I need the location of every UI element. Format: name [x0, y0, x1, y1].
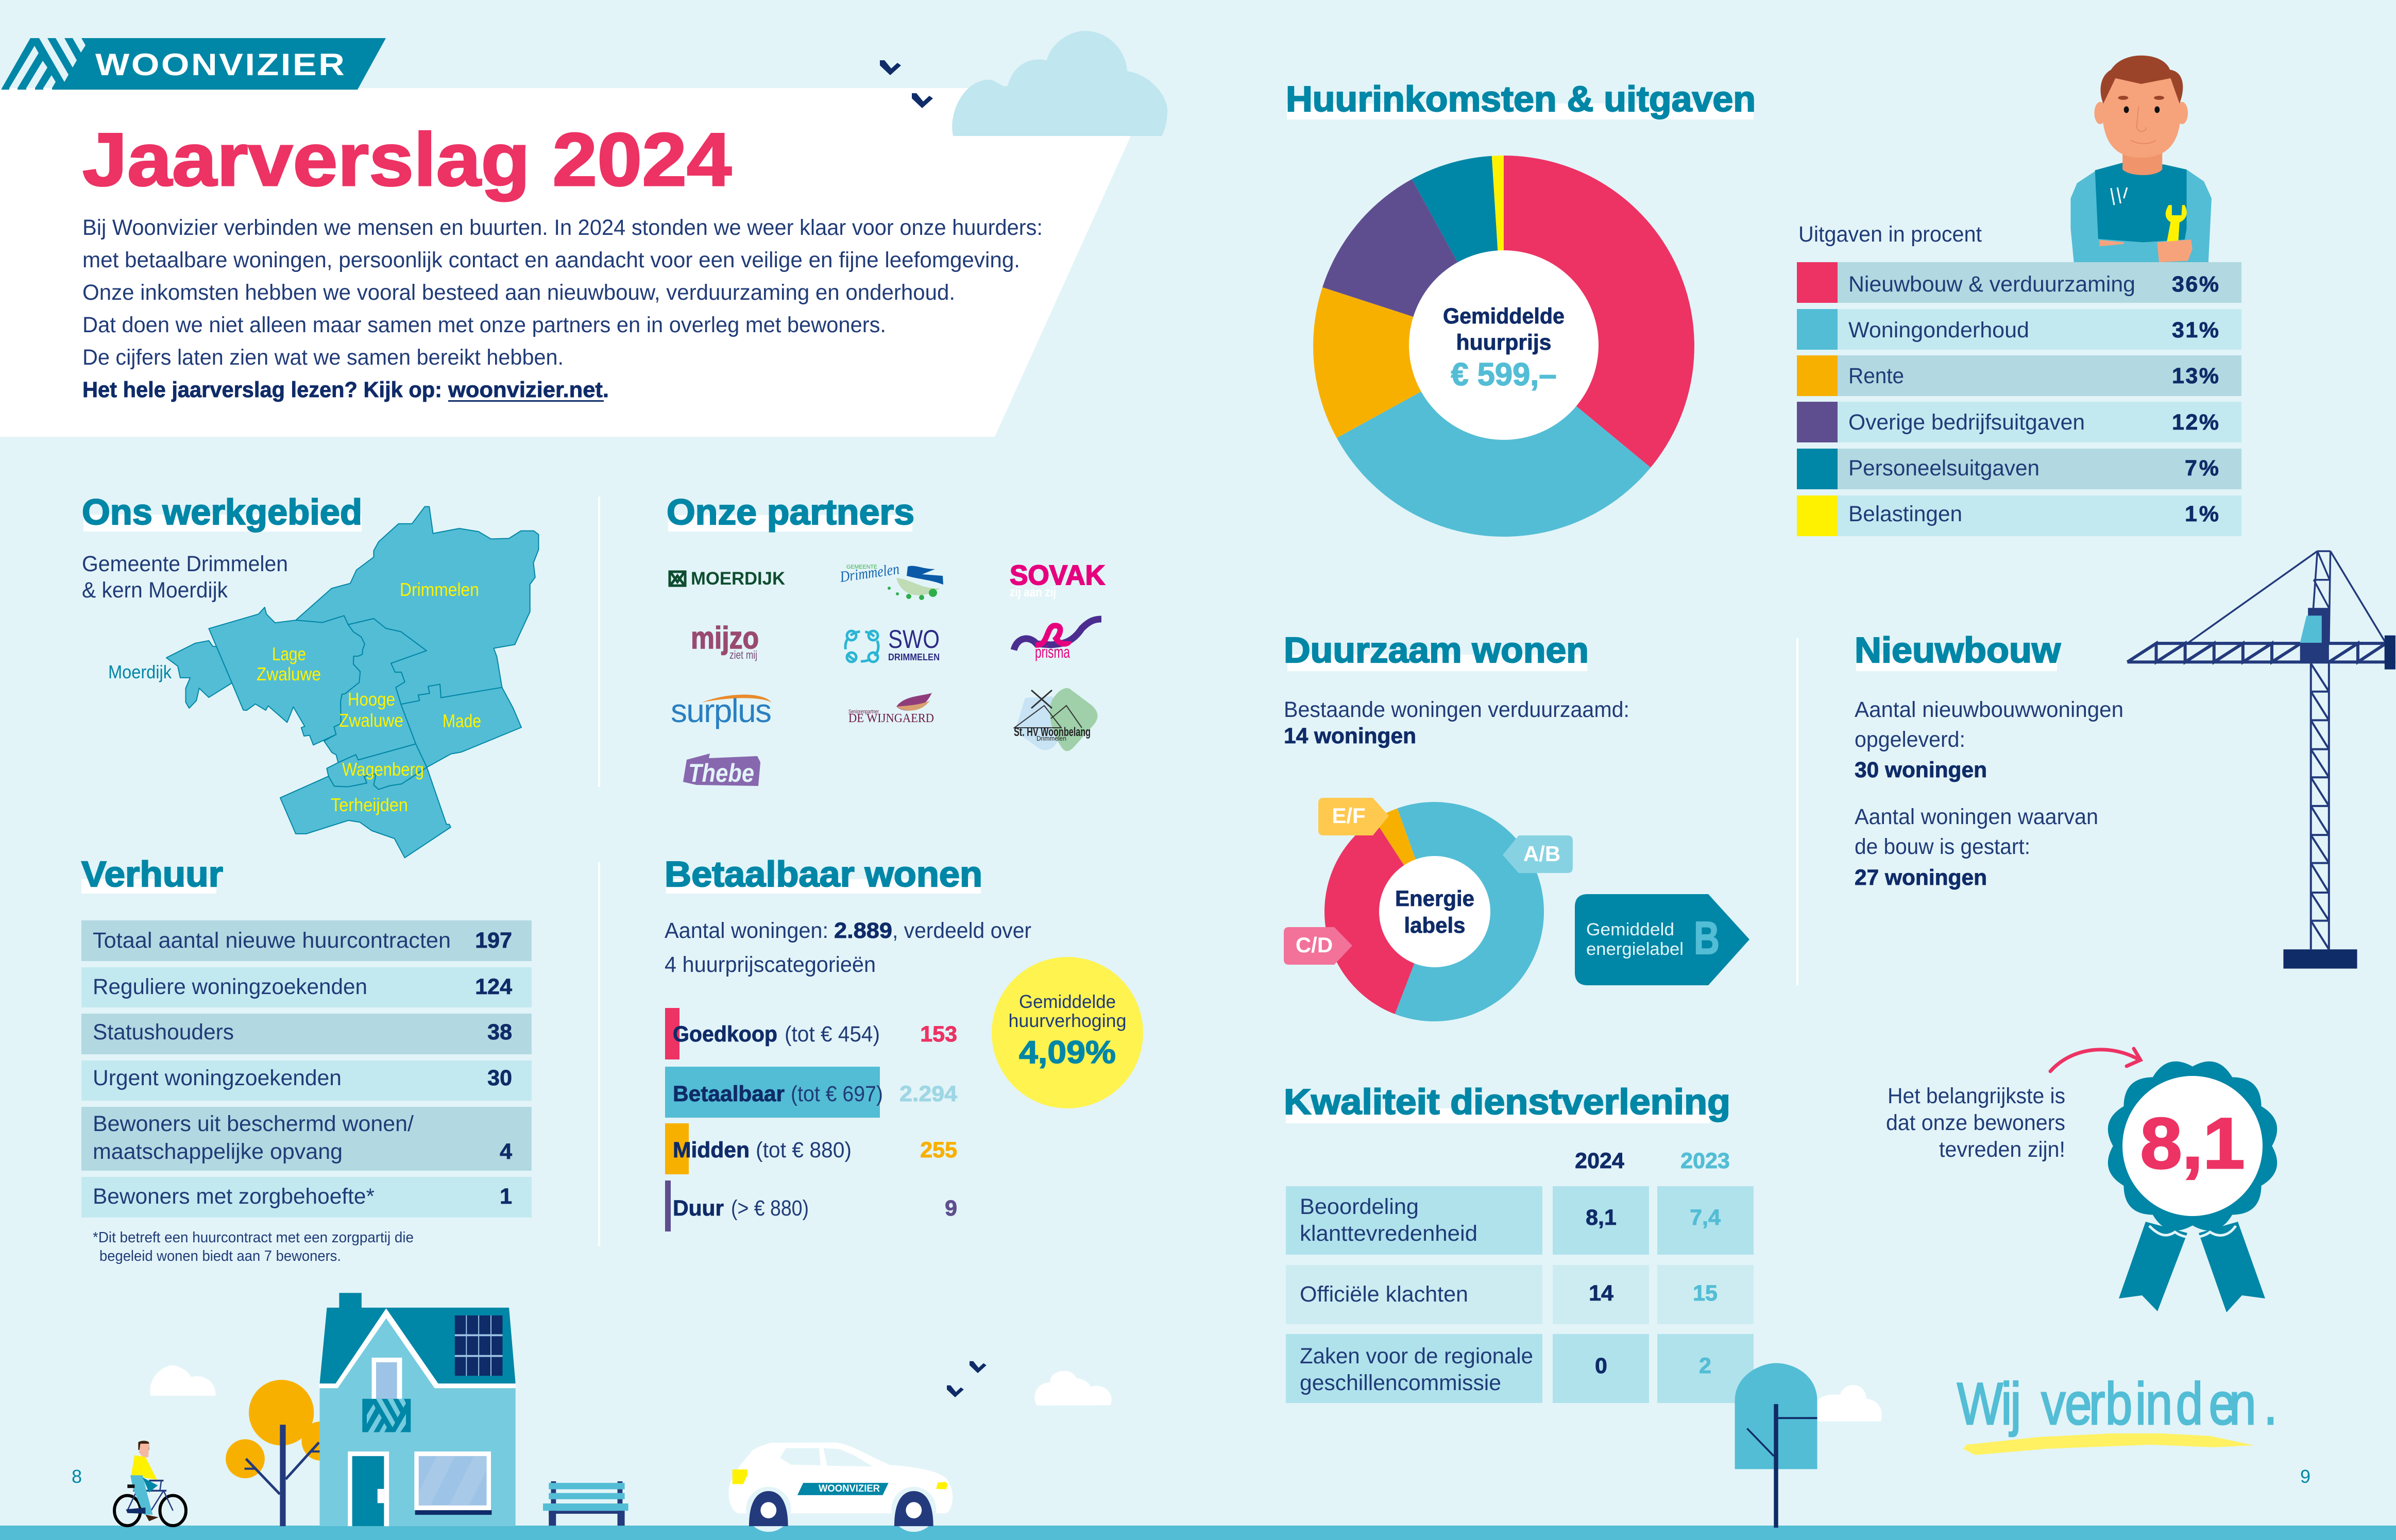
bar chart: [665, 1008, 957, 1231]
betaalbaar intro: Aantal woningen:: [665, 918, 828, 943]
table: kwaliteit: 2024: [1575, 1149, 1624, 1173]
table: kwaliteit: Officiële klachten: [1300, 1282, 1468, 1307]
intro text: met betaalbare woningen, persoonlijk contact en aandacht voor een veilige en fijne leefomgeving.: [82, 248, 1020, 272]
duurzaam text: [1284, 697, 1629, 748]
callout: huurverhoging: [992, 957, 1143, 1108]
table: kwaliteit: 2: [1699, 1354, 1711, 1378]
tag: E/F: E/F: [1332, 803, 1366, 828]
illustration: man: [2070, 56, 2212, 262]
callout: huurverhoging: 4,09%: [1019, 1035, 1116, 1070]
werkgebied subtitle: [82, 552, 288, 603]
cloud left: [150, 1365, 216, 1396]
logo: de wijngaerd: [848, 693, 934, 725]
donut: uitgaven: Gemiddelde: [1443, 304, 1565, 329]
quote text: tevreden zijn!: [1939, 1137, 2065, 1162]
slogan: Wij verbinden.: [1957, 1371, 2278, 1437]
legend table: uitgaven: Rente: [1848, 364, 1904, 388]
birds top: [880, 60, 933, 108]
rosette: [2109, 1063, 2276, 1312]
logo: mijzo: ziet mij: [729, 648, 757, 661]
logo: mijzo: mijzo: [691, 621, 759, 655]
table: verhuur: 38: [487, 1020, 512, 1045]
heading: onze partners: Onze partners: [667, 492, 914, 532]
intro text: Het hele jaarverslag lezen? Kijk op:: [82, 378, 442, 402]
cloud middle: [1034, 1371, 1112, 1406]
arrow: [2050, 1049, 2140, 1071]
table: verhuur: Urgent woningzoekenden: [93, 1066, 342, 1090]
legend table: uitgaven: Belastingen: [1848, 502, 1962, 526]
nieuwbouw text: opgeleverd:: [1855, 727, 1965, 752]
logo: gemeente drimmelen: [839, 560, 943, 600]
badge: gemiddeld energielabel: [1575, 894, 1749, 985]
table: kwaliteit: Beoordeling: [1300, 1194, 1419, 1219]
heading: verhuur: Verhuur: [81, 854, 223, 894]
callout: huurverhoging: huurverhoging: [1009, 1010, 1126, 1031]
logo: swo drimmelen: [845, 625, 940, 662]
heading: nieuwbouw: Nieuwbouw: [1855, 630, 2061, 670]
uitgaven caption: Uitgaven in procent: [1798, 222, 1982, 247]
logo: woonbelang: Drimmelen: [1036, 734, 1066, 742]
bar chart: Duur: [673, 1196, 724, 1221]
map: Hooge: [348, 689, 395, 710]
map: Terheijden: [331, 794, 408, 815]
legend table: uitgaven: [1797, 262, 2241, 536]
bar chart: 2.294: [899, 1082, 957, 1106]
intro text: Dat doen we niet alleen maar samen met onze partners en in overleg met bewoners.: [82, 313, 886, 337]
tag: A/B: [1503, 835, 1573, 873]
nieuwbouw text: de bouw is gestart:: [1855, 834, 2030, 859]
logo: de wijngaerd: Seniorenpartner: [848, 709, 879, 715]
page number 8: 8: [72, 1466, 82, 1487]
tree right with cloud: [1735, 1363, 1882, 1528]
badge: gemiddeld energielabel: B: [1694, 913, 1720, 964]
nieuwbouw text: Aantal nieuwbouwwoningen: [1855, 697, 2123, 722]
legend table: uitgaven: 31%: [2172, 318, 2219, 343]
intro text: [82, 215, 1043, 402]
tag: E/F: [1318, 798, 1389, 835]
logo: surplus: surplus: [671, 692, 772, 729]
legend table: uitgaven: 1%: [2185, 502, 2219, 526]
legend table: uitgaven: 13%: [2172, 364, 2219, 388]
bar chart: (> € 880): [731, 1196, 809, 1221]
legend table: uitgaven: Overige bedrijfsuitgaven: [1848, 410, 2085, 435]
illustration: crane: [2127, 551, 2395, 969]
logo: swo drimmelen: DRIMMELEN: [888, 652, 940, 662]
map: Lage: [272, 643, 306, 664]
car: [728, 1443, 953, 1532]
logo: prisma: prisma: [1035, 643, 1070, 661]
donut: uitgaven: € 599,–: [1451, 357, 1557, 392]
footnote: [93, 1229, 414, 1264]
bar chart: 255: [920, 1138, 957, 1162]
betaalbaar intro: 2.889: [834, 918, 892, 943]
logo: moerdijk: MOERDIJK: [691, 569, 785, 589]
donut: uitgaven: huurprijs: [1456, 330, 1552, 355]
cyclist: [114, 1441, 186, 1526]
table: kwaliteit: 14: [1589, 1281, 1613, 1306]
birds bottom: [947, 1361, 987, 1397]
table: verhuur: Bewoners uit beschermd wonen/: [93, 1111, 414, 1136]
table: kwaliteit: 7,4: [1690, 1205, 1721, 1230]
intro text: Bij Woonvizier verbinden we mensen en buurten. In 2024 stonden we weer klaar voor onze huurders:: [82, 215, 1043, 240]
map: Zwaluwe: [257, 663, 321, 685]
quote text: Het belangrijkste is: [1888, 1084, 2065, 1108]
table: kwaliteit: geschillencommissie: [1300, 1371, 1501, 1395]
tag: A/B: A/B: [1523, 842, 1560, 866]
table: verhuur: 124: [475, 974, 512, 999]
table: kwaliteit: 0: [1595, 1354, 1607, 1378]
heading: ons werkgebied: Ons werkgebied: [82, 492, 362, 532]
legend table: uitgaven: Personeelsuitgaven: [1848, 456, 2040, 481]
nieuwbouw text: 30 woningen: [1855, 758, 1987, 782]
table: verhuur: [81, 920, 532, 1218]
legend table: uitgaven: Nieuwbouw & verduurzaming: [1848, 272, 2135, 297]
werkgebied subtitle: Gemeente Drimmelen: [82, 552, 288, 576]
bar chart: 153: [920, 1022, 957, 1047]
table: verhuur: 197: [475, 928, 512, 953]
logo: gemeente drimmelen: Drimmelen: [839, 560, 900, 586]
bench: [543, 1481, 628, 1526]
quote text: dat onze bewoners: [1886, 1110, 2065, 1135]
donut: uitgaven: [1313, 156, 1694, 537]
betaalbaar intro: 4 huurprijscategorieën: [665, 952, 876, 977]
quote text: [1886, 1084, 2065, 1162]
callout: huurverhoging: Gemiddelde: [1019, 991, 1116, 1012]
legend table: uitgaven: 12%: [2172, 410, 2219, 435]
title: Jaarverslag 2024: [82, 117, 732, 201]
tree: [226, 1380, 339, 1526]
logo banner: WOONVIZIER: [95, 47, 346, 82]
donut: energielabels: Energie: [1395, 886, 1474, 911]
donut: energielabels: [1324, 802, 1544, 1021]
nieuwbouw text: 27 woningen: [1855, 865, 1987, 890]
rosette: 8,1: [2140, 1103, 2245, 1184]
intro panel: [0, 88, 1152, 437]
heading: duurzaam wonen: Duurzaam wonen: [1284, 630, 1589, 670]
street scene: [114, 1293, 1112, 1532]
logo: thebe: Thebe: [688, 759, 754, 788]
map: Wagenberg: [342, 759, 424, 780]
house: [319, 1293, 516, 1526]
table: verhuur: 30: [487, 1066, 512, 1090]
table: verhuur: 4: [500, 1139, 512, 1164]
logo: woonbelang: St. HV Woonbelang: [1014, 725, 1091, 739]
tag: C/D: C/D: [1296, 933, 1333, 957]
partner logos: [670, 560, 1105, 788]
table: verhuur: Statushouders: [93, 1020, 234, 1045]
cloud top: [952, 31, 1167, 136]
badge: gemiddeld energielabel: energielabel: [1586, 939, 1684, 959]
table: verhuur: Totaal aantal nieuwe huurcontracten: [93, 928, 451, 953]
table: verhuur: maatschappelijke opvang: [93, 1139, 343, 1164]
map: Zwaluwe: [339, 710, 403, 731]
bar chart: (tot € 454): [785, 1022, 880, 1047]
ground: [0, 1526, 2396, 1540]
logo: sovak: zij aan zij: [1010, 584, 1056, 600]
bar chart: Betaalbaar: [673, 1082, 785, 1106]
footnote: begeleid wonen biedt aan 7 bewoners.: [99, 1248, 341, 1264]
table: kwaliteit: 2023: [1680, 1149, 1730, 1173]
table: kwaliteit: [1286, 1149, 1754, 1403]
logo: woonbelang: [1014, 688, 1097, 751]
table: verhuur: Bewoners met zorgbehoefte*: [93, 1184, 375, 1209]
logo: de wijngaerd: DE WIJNGAERD: [848, 712, 934, 725]
heading: kwaliteit dienstverlening: Kwaliteit dienstverlening: [1284, 1082, 1730, 1122]
nieuwbouw text: [1855, 697, 2123, 890]
bar chart: (tot € 880): [756, 1138, 852, 1162]
donut: energielabels: labels: [1404, 913, 1465, 938]
logo: swo drimmelen: SWO: [888, 625, 940, 654]
duurzaam text: Bestaande woningen verduurzaamd:: [1284, 697, 1629, 722]
house logo and window glass: [367, 1399, 486, 1505]
badge: gemiddeld energielabel: Gemiddeld: [1586, 920, 1674, 939]
logo: gemeente drimmelen: GEMEENTE: [846, 564, 877, 570]
bar chart: (tot € 697): [791, 1082, 883, 1106]
table: verhuur: Reguliere woningzoekenden: [93, 974, 367, 999]
logo banner: [1, 38, 386, 90]
table: kwaliteit: 15: [1693, 1281, 1718, 1306]
legend table: uitgaven: 7%: [2185, 456, 2219, 481]
map: Made: [443, 710, 481, 731]
duurzaam text: 14 woningen: [1284, 724, 1416, 748]
betaalbaar intro: [665, 918, 1031, 977]
table: kwaliteit: klanttevredenheid: [1300, 1221, 1477, 1246]
intro text: De cijfers laten zien wat we samen bereikt hebben.: [82, 345, 564, 370]
heading: betaalbaar wonen: Betaalbaar wonen: [665, 854, 982, 894]
map: Moerdijk: [108, 661, 172, 682]
werkgebied subtitle: & kern Moerdijk: [82, 578, 228, 603]
map: Drimmelen: [400, 579, 479, 600]
nieuwbouw text: Aantal woningen waarvan: [1855, 805, 2098, 829]
intro text: Onze inkomsten hebben we vooral besteed aan nieuwbouw, verduurzaming en onderhoud.: [82, 280, 955, 305]
footnote: *Dit betreft een huurcontract met een zorgpartij die: [93, 1229, 414, 1246]
table: verhuur: 1: [500, 1184, 512, 1209]
tag: C/D: [1284, 927, 1352, 965]
table: kwaliteit: 8,1: [1586, 1205, 1617, 1230]
betaalbaar intro: , verdeeld over: [892, 918, 1031, 943]
heading: huurinkomsten: Huurinkomsten & uitgaven: [1286, 79, 1756, 119]
legend table: uitgaven: Woningonderhoud: [1848, 318, 2029, 343]
logo: sovak: SOVAK: [1010, 560, 1105, 591]
map: [108, 507, 538, 858]
legend table: uitgaven: 36%: [2172, 272, 2219, 297]
car logo text: WOONVIZIER: [819, 1483, 880, 1494]
intro text: woonvizier.net.: [448, 378, 609, 402]
bar chart: Midden: [673, 1138, 750, 1162]
logo: prisma: [1014, 619, 1101, 661]
bar chart: Goedkoop: [673, 1022, 777, 1047]
bar chart: 9: [945, 1196, 957, 1221]
table: kwaliteit: Zaken voor de regionale: [1300, 1344, 1533, 1368]
page number 9: 9: [2300, 1466, 2310, 1487]
